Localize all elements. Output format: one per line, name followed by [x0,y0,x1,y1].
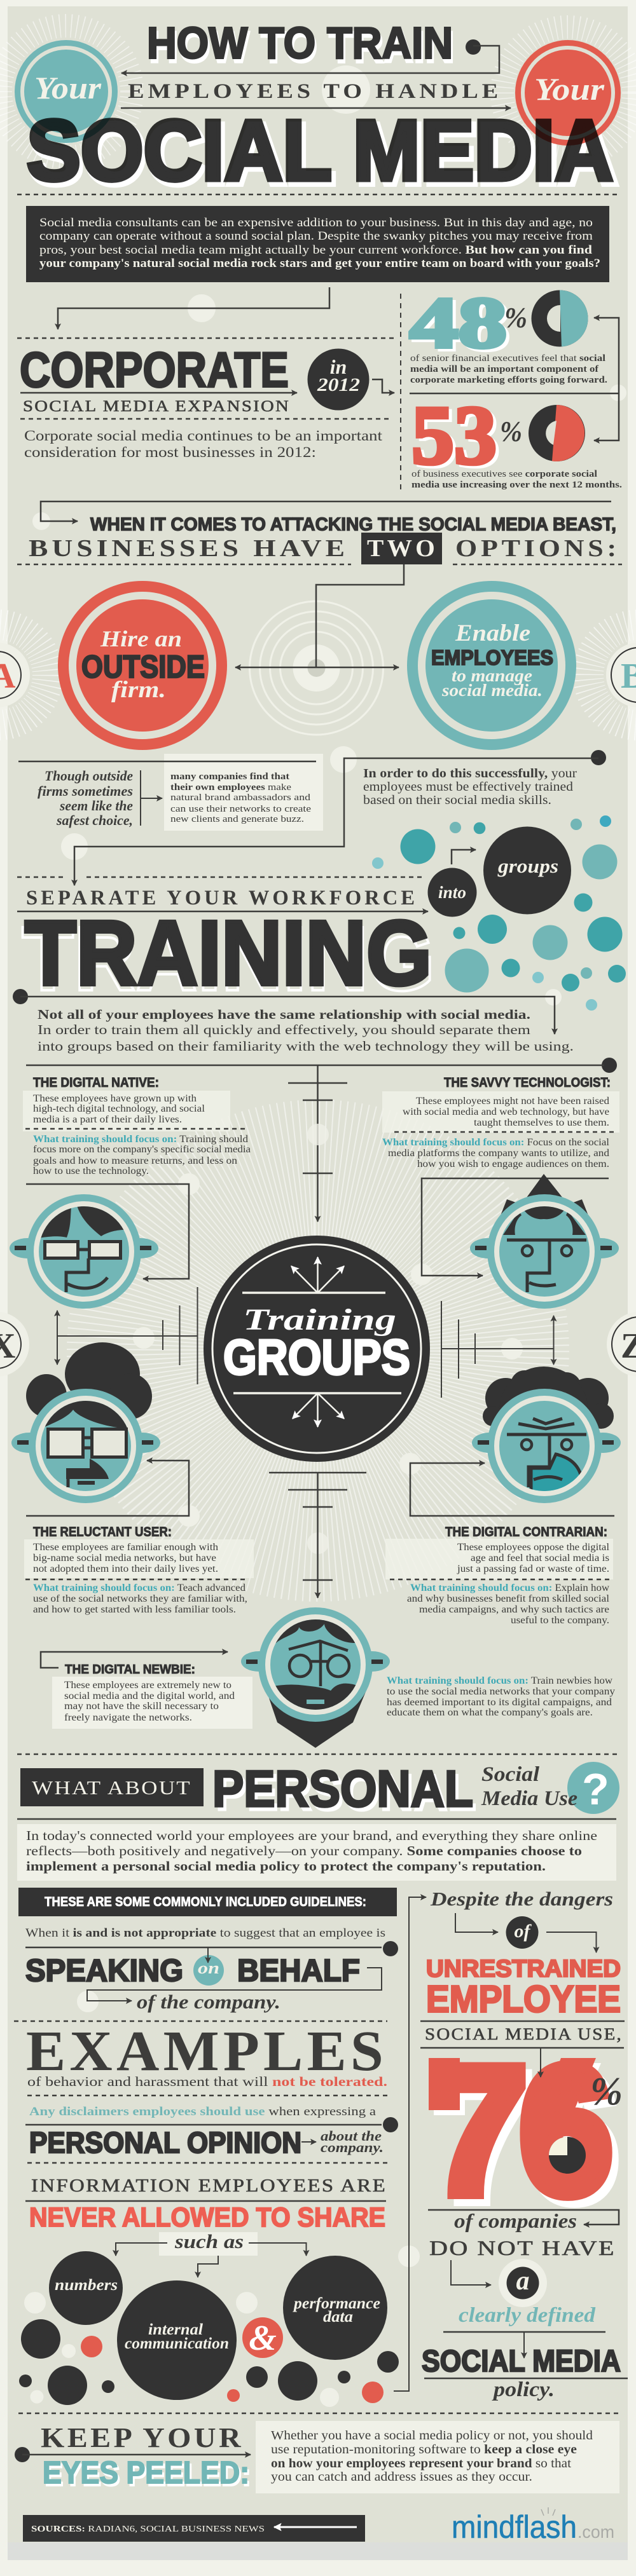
heading: keep your eyes peeled: KEEP YOUR [41,2422,244,2453]
group: digital native text: high-tech digital technology, and social [33,1103,205,1114]
guideline: personal opinion: Any disclaimers employees should use when expressing a [29,2105,377,2118]
text: newbie focus: to use the social media networks that your company [387,1686,615,1697]
group: digital native text: THE DIGITAL NATIVE: [33,1075,159,1090]
group: reluctant user text: THE RELUCTANT USER: [33,1525,172,1539]
face: reluctant user [11,1342,160,1503]
heading: businesses have two options: OPTIONS: [455,535,620,562]
guideline: examples: EXAMPLES [26,2020,387,2083]
callout: such as [116,2230,307,2277]
logo: mindflash: .com [577,2522,614,2542]
bubble: groups: groups [497,855,558,877]
panel: guidelines header [18,1888,397,1916]
bubble: numbers: numbers [55,2277,118,2294]
central badge: training groups: GROUPS [223,1329,410,1385]
subheading: SOCIAL MEDIA EXPANSION [23,398,290,415]
sunburst [140,1173,496,1529]
group: reluctant user text: not adopted them into their daily lives yet. [33,1564,218,1574]
heading: businesses have two options: TWO [367,535,438,562]
text: though outside firms: safest choice, [56,812,133,828]
panel: despite the dangers: Despite the dangers [430,1888,613,1910]
panel: despite the dangers: of [514,1921,532,1942]
text: in order to do this: employees must be effectively trained [363,780,573,794]
target rings [249,601,383,735]
group: digital contrarian text [385,1525,613,1626]
text: newbie focus [387,1675,615,1718]
bubble: internal communication: internal [148,2321,203,2338]
guideline: speaking on behalf: on [198,1959,219,1977]
section: corporate [20,342,394,460]
option: enable employees [407,581,576,750]
group: savvy technologist text: What training should focus on: Focus on the social [382,1137,609,1148]
heading: businesses have two options: BUSINESSES HAVE [29,535,349,562]
bubble: into: into [438,883,466,902]
stat: 48 percent: 48 [413,285,510,365]
shadow of 76 [432,2034,620,2240]
text: newbie focus: educate them on what the company's goals are. [387,1707,593,1718]
side badge X [0,1312,29,1377]
heading: keep your eyes peeled: EYES PEELED: [45,2458,251,2493]
group: reluctant user text [24,1525,254,1615]
option: enable employees: social media. [441,681,543,700]
face: digital newbie [241,1607,390,1748]
panel: despite the dangers: SOCIAL MEDIA USE, [425,2025,623,2043]
guideline: personal opinion: about the [321,2128,382,2144]
face: digital contrarian [472,1366,621,1503]
group: digital contrarian text: and why businesses benefit from skilled social [407,1593,609,1604]
group: reluctant user text: use of the social networks they are familiar with, [33,1593,247,1604]
arrow: under corporate [20,392,297,393]
decorative dots [19,2292,399,2407]
heading: when it comes: WHEN IT COMES TO ATTACKING THE SOCIAL MEDIA BEAST, [90,515,616,535]
group: digital newbie text: freely navigate the networks. [64,1712,192,1723]
right column line [394,1897,426,2391]
panel: intro [26,206,609,282]
text: 48 caption: corporate marketing efforts going forward. [410,375,607,385]
title block: SOCIAL MEDIA [29,106,618,202]
arrow: badge to stats [372,379,394,393]
group: digital native text: goals and how to measure returns, and less on [33,1155,237,1166]
group: reluctant user text: and how to get started with less familiar tools. [33,1604,236,1615]
face: savvy technologist [470,1174,619,1309]
group: savvy technologist text: how you wish to engage audiences on them. [417,1159,609,1169]
panel: intro: Social media consultants can be an expensive addition to your business. But in this day and age, no [39,216,593,229]
text: in order to do this: In order to do this successfully, your [363,767,577,780]
text: many companies: natural brand ambassadors and [170,793,311,803]
panel: intro: your company's natural social media rock stars and get your entire team on board with your goals? [39,257,600,270]
text: in order to do this [363,767,577,807]
arrow: below subtitle [121,107,511,109]
heading: social media: SOCIAL MEDIA [27,102,613,198]
stat: 53 percent: % [500,415,522,447]
guideline: never allowed to share: NEVER ALLOWED TO SHARE [29,2202,385,2233]
group: digital native text: how to use the technology. [33,1166,149,1176]
heading: what about personal: ? [582,1764,609,1814]
text: many companies: their own employees make [170,782,291,793]
title block [0,18,633,202]
group: savvy technologist text: with social media and web technology, but have [403,1107,609,1117]
bubble: groups [483,826,571,914]
face: digital native [10,1194,158,1309]
option: outside firm: OUTSIDE [81,649,205,685]
guideline: speaking on behalf: of the company. [137,1991,280,2013]
option: outside firm: firm. [111,677,166,703]
arrow: to options heading [32,501,611,530]
group: digital newbie text: social media and the digital world, and [64,1691,235,1701]
group: savvy technologist text: media platforms the company wants to utilize, and [388,1148,609,1159]
group: savvy technologist text: taught themselves to use them. [474,1117,609,1128]
footer: sources [23,2515,365,2542]
text: 53 caption [411,469,622,490]
stat: 76 percent: 7 [426,2027,529,2233]
group: savvy technologist text [382,1075,619,1169]
bubble: performance data: data [323,2308,353,2326]
group: reluctant user text: These employees are familiar enough with [33,1542,218,1553]
option B badge [588,625,636,725]
group: digital native text: media is a part of their daily lives. [33,1114,182,1125]
guideline: speaking on behalf: When it is and is not appropriate to suggest that an employee is [25,1926,385,1940]
circuit lines: right [441,1301,553,1398]
text: though outside firms: Though outside [45,768,133,784]
guideline: speaking on behalf: SPEAKING [25,1954,183,1988]
heading: what about personal: PERSONAL [216,1764,476,1822]
heading: keep your eyes peeled [15,2422,251,2493]
logo: mindflash: mindflash [452,2509,577,2545]
shadow of 76: 6 [525,2034,620,2240]
heading: businesses have two options [29,533,620,564]
side badge Z [607,1312,636,1377]
text: though outside firms: firms sometimes [38,783,133,799]
panel: personal intro: implement a personal social media policy to protect the company's reputation. [26,1858,546,1874]
panel: of companies: a [516,2266,529,2296]
connectors: bottom faces [26,1453,614,1527]
chart: donut 53 [529,405,585,461]
text: 48 caption: media will be an important component of [410,364,599,374]
icon: arrows up [291,1257,344,1293]
bubble: performance data [283,2256,387,2360]
heading: what about personal [20,1761,619,1822]
heading: what about personal: PERSONAL [212,1761,473,1818]
bubble: internal communication: communication [125,2335,229,2352]
icon: arrows down [293,1393,344,1427]
panel: personal intro: In today's connected world your employees are your brand, and everything they share online [26,1828,597,1843]
group: digital contrarian text: THE DIGITAL CONTRARIAN: [445,1525,607,1539]
heading: separate your workforce: SEPARATE YOUR WORKFORCE [26,887,418,910]
guideline: personal opinion: PERSONAL OPINION [29,2126,301,2159]
text: not all employees: In order to train them all quickly and effectively, you should separate them [38,1022,530,1037]
connector: to training [61,746,606,885]
guideline: speaking on behalf [25,1926,398,2013]
option: enable employees: to manage [452,666,532,685]
bubble: performance data: performance [293,2295,380,2312]
panel: despite the dangers: UNRESTRAINED [426,1956,621,1982]
option: outside firm: Hire an [100,626,182,651]
guideline: speaking on behalf: BEHALF [237,1954,360,1988]
heading: what about personal: Media Use [481,1787,577,1810]
stat: 53 percent [411,388,622,490]
stat: 53 percent: 53 [415,391,500,484]
text: many companies: new clients and generate buzz. [170,814,304,824]
title block: HOW TO TRAIN [149,22,455,72]
group: reluctant user text: big-name social media networks, but have [33,1553,216,1564]
panel: guidelines header: THESE ARE SOME COMMONLY INCLUDED GUIDELINES: [45,1895,366,1909]
heading: what about personal: Social [481,1763,540,1786]
panel: of companies: of companies [454,2209,577,2232]
panel: monitoring text: you can catch and address issues as they occur. [271,2470,532,2484]
group: digital contrarian text: useful to the company. [511,1615,609,1626]
text: though outside firms [38,768,133,828]
panel: personal intro [17,1824,616,1881]
panel: intro: pros, your best social media team might actually be your current workforce. But how can you find [39,243,592,257]
bubbles decoration [372,815,626,1011]
stat: 76 percent [426,2027,623,2240]
badge: Your red: Your [534,71,605,107]
option: enable employees: EMPLOYEES [431,646,553,669]
text: not all employees: Not all of your employees have the same relationship with social media. [38,1007,530,1022]
group: savvy technologist text: These employees might not have been raised [416,1096,609,1107]
heading: what about personal: WHAT ABOUT [32,1776,191,1799]
group: digital newbie text: THE DIGITAL NEWBIE: [65,1663,195,1677]
heading: employees to handle: EMPLOYEES TO HANDLE [128,80,502,103]
text: in order to do this: based on their social media skills. [363,794,551,807]
panel: intro: company can operate without a sound social plan. Despite the swanky pitches you may receive from [39,229,593,243]
panel: of companies: policy. [492,2378,555,2401]
text: 48 caption [410,353,607,385]
text: corporate body [24,428,383,460]
arrow: intro to corporate [58,287,329,329]
stat: 48 percent [410,282,607,385]
callout: such as: such as [174,2230,244,2252]
text: though outside firms: seem like the [59,798,133,814]
connector: training to text [13,989,562,1034]
text: many companies [170,772,311,824]
central axis bottom [269,1473,366,1598]
bubble: into [427,868,477,917]
badge: Your red [515,40,621,146]
guideline: personal opinion: company. [321,2139,384,2155]
group: digital contrarian text: These employees oppose the digital [457,1542,609,1553]
arrows: two options [235,564,404,667]
badge: in 2012: 2012 [317,374,360,395]
stat: 76 percent: 6 [518,2027,614,2233]
arrow: under separate [17,911,428,912]
central badge: training groups [204,1236,430,1462]
bubble: ampersand [242,2317,283,2358]
panel: monitoring text [256,2421,619,2493]
text: 48 caption: of senior financial executives feel that social [410,353,605,364]
stat: 48 percent: 48 [410,282,507,363]
badge: Your teal [15,40,118,143]
option: enable employees: Enable [455,620,530,646]
arrow: into to groups [452,850,476,864]
text: many companies: many companies find that [170,772,289,782]
group: digital newbie text: may not have the skill necessary to [64,1701,219,1712]
group: digital contrarian text: media campaigns, and why such tactics are [419,1604,609,1615]
bubble: internal communication [117,2280,237,2400]
group: digital contrarian text: What training should focus on: Explain how [410,1583,610,1593]
heading: keep your eyes peeled: EYES PEELED: [43,2456,249,2490]
group: reluctant user text: What training should focus on: Teach advanced [33,1583,245,1593]
stat: 76 percent: % [590,2070,623,2113]
group: digital native text: focus more on the company's specific social media [33,1144,251,1155]
guideline: never allowed to share: INFORMATION EMPLOYEES ARE [31,2176,387,2196]
text: not all employees: into groups based on their familiarity with the web technology they will be using. [38,1039,574,1054]
shadow of 76: 7 [432,2034,535,2240]
group: digital native text [23,1075,251,1176]
option: outside firm [58,581,227,750]
text: 53 caption: of business executives see corporate social [411,469,597,479]
connectors: top faces [26,1173,609,1285]
stat: 53 percent: 53 [411,388,497,482]
central badge: training groups: Training [243,1303,396,1337]
panel: monitoring text: use reputation-monitoring software to keep a close eye [271,2443,577,2457]
arrows: stats bracket [410,318,626,440]
panel: of companies: DO NOT HAVE [429,2237,616,2260]
panel: of companies: clearly defined [459,2304,596,2327]
panel: despite the dangers: EMPLOYEE [426,1978,621,2020]
text: not all employees [38,1007,574,1054]
panel: monitoring text: on how your employees represent your brand so that [271,2457,572,2470]
footer: sources: SOURCES: RADIAN6, SOCIAL BUSINESS NEWS [31,2525,265,2534]
badge: Your teal: Your [34,70,102,106]
group: digital native text: What training should focus on: Training should [33,1134,248,1145]
heading: corporate: CORPORATE [20,342,289,398]
stat: 48 percent: % [504,301,527,334]
guideline: examples: of behavior and harassment that will not be tolerated. [27,2074,387,2089]
text: newbie focus: What training should focus on: Train newbies how [387,1675,613,1686]
text: corporate body: Corporate social media continues to be an important [24,428,383,444]
panel: personal intro: reflects—both positively and negatively—on your company. Some companies choose to [26,1843,582,1858]
text: newbie focus: has deemed important to its digital campaigns, and [387,1697,612,1708]
option A badge [0,625,48,725]
panel: despite the dangers [420,1888,625,2048]
arrow: title connector [121,39,499,73]
guideline: personal opinion [25,2105,398,2159]
text: many companies: can use their networks to create [170,804,311,814]
chart: pie 76 [549,2137,586,2174]
group: digital native text: These employees have grown up with [33,1093,197,1104]
group: digital contrarian text: age and feel that social media is [471,1553,609,1564]
group: digital contrarian text: just a passing fad or waste of time. [457,1564,609,1574]
heading: how to train: HOW TO TRAIN [147,18,453,67]
panel: though outside [18,754,323,831]
bubble: numbers [49,2251,123,2325]
heading: training: TRAINING [25,902,432,1004]
text: corporate body: consideration for most businesses in 2012: [24,444,316,460]
circuit lines: left [57,1287,197,1384]
badge: in 2012 [308,348,369,411]
panel: monitoring text: Whether you have a social media policy or not, you should [271,2429,593,2443]
guideline: never allowed to share [25,2176,387,2233]
group: savvy technologist text: THE SAVVY TECHNOLOGIST: [444,1075,611,1090]
panel: of companies [422,2209,628,2401]
bubble: ampersand: & [249,2319,277,2358]
text: 53 caption: media use increasing over the next 12 months. [411,480,622,490]
group: digital newbie text [41,1652,252,1729]
heading: training: TRAINING [22,908,435,1010]
chart: donut 48 [532,290,588,347]
badge: in 2012: in [330,355,347,378]
group: digital newbie text: These employees are extremely new to [64,1680,232,1691]
central axis top [26,1058,617,1222]
